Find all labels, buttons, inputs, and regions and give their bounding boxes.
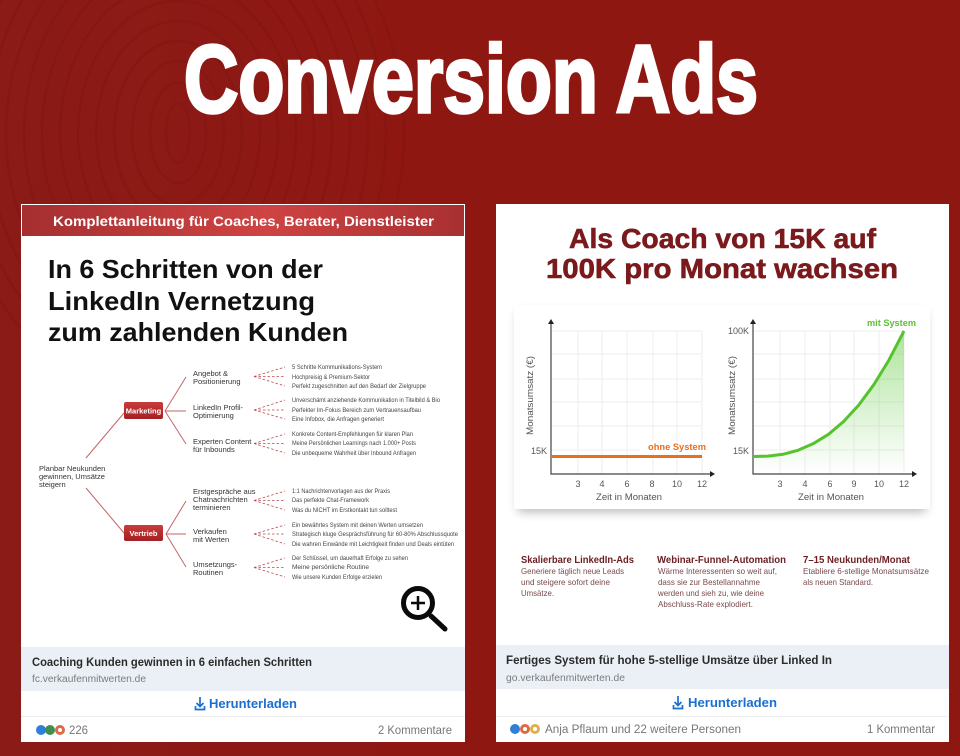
- topic labels: Erstgespräche aus: [193, 487, 256, 496]
- chart: ohne System: 10: [672, 479, 682, 489]
- detail bullet texts: 5 Schritte Kommunikations-System: [292, 365, 382, 371]
- benefit: 7–15 Neukunden/Monat: als neuen Standard.: [803, 577, 873, 587]
- card headline: Als Coach von 15K auf: [569, 223, 877, 254]
- chart: ohne System: Zeit in Monaten: [596, 492, 662, 502]
- link bar: fc.verkaufenmitwerten.de: [32, 674, 146, 685]
- fingerprint pattern: [0, 0, 420, 756]
- chart: ohne System: Monatsumsatz (€): [525, 356, 535, 435]
- detail bullet texts: Perfekter Im-Fokus Bereich zum Vertrauensaufbau: [292, 408, 421, 414]
- mind map: [39, 365, 459, 581]
- card headline: In 6 Schritten von der: [48, 254, 323, 284]
- card headline: LinkedIn Vernetzung: [48, 286, 315, 316]
- topic labels: für Inbounds: [193, 445, 235, 454]
- benefit: 7–15 Neukunden/Monat: [803, 555, 929, 587]
- chart: ohne System: 4: [599, 479, 605, 489]
- node: Marketing: [124, 402, 163, 419]
- topic labels: terminieren: [193, 503, 231, 512]
- link bar: Coaching Kunden gewinnen in 6 einfachen Schritten: [32, 657, 312, 669]
- reactions row: [510, 724, 935, 736]
- topic labels: Experten Content: [193, 437, 252, 446]
- mind map root: [39, 464, 105, 489]
- reactions row: 2 Kommentare: [378, 725, 452, 737]
- card header banner: Komplettanleitung für Coaches, Berater, Dienstleister: [53, 213, 435, 229]
- download button: Herunterladen: [688, 695, 777, 710]
- mind map branches: [86, 377, 186, 567]
- link bar: Fertiges System für hohe 5-stellige Umsätze über Linked In: [506, 655, 832, 667]
- benefit: Webinar-Funnel-Automation: werden und sieh zu, wie deine: [657, 588, 764, 598]
- card headline: zum zahlenden Kunden: [48, 317, 348, 347]
- benefit: Webinar-Funnel-Automation: [657, 555, 786, 609]
- chart: ohne System: 12: [697, 479, 707, 489]
- chart: mit System: 4: [802, 479, 808, 489]
- benefit: 7–15 Neukunden/Monat: Etabliere 6-stellige Monatsumsätze: [803, 566, 929, 576]
- benefit: Skalierbare LinkedIn-Ads: [521, 555, 634, 598]
- detail bullet texts: Strategisch kluge Gesprächsführung für 60-80% Abschlussquote: [292, 532, 459, 538]
- detail bullet texts: Eine Infobox, die Anfragen generiert: [292, 417, 384, 423]
- detail bullet texts: Perfekt zugeschnitten auf den Bedarf der Zielgruppe: [292, 384, 427, 390]
- mind map root: Planbar Neukunden: [39, 464, 105, 473]
- chart: mit System: 100K: [728, 326, 749, 336]
- card headline: [546, 223, 898, 284]
- topic labels: Chatnachrichten: [193, 495, 248, 504]
- benefit: 7–15 Neukunden/Monat: 7–15 Neukunden/Monat: [803, 555, 911, 566]
- panel: right ad card: [496, 204, 949, 742]
- detail bullet texts: Wie unsere Kunden Erfolge erzielen: [292, 575, 382, 581]
- topic labels: Angebot &: [193, 369, 228, 378]
- card header banner: [22, 205, 464, 236]
- node: Marketing: Marketing: [126, 406, 162, 416]
- detail bullet texts: Unverschämt anziehende Kommunikation in Titelbild & Bio: [292, 398, 441, 404]
- detail bullet texts: Konkrete Content-Empfehlungen für klaren Plan: [292, 432, 413, 438]
- topic labels: Verkaufen: [193, 527, 227, 536]
- chart: ohne System: ohne System: [648, 442, 706, 453]
- chart: ohne System: 3: [575, 479, 581, 489]
- chart panel: [514, 305, 930, 512]
- chart: mit System: 6: [827, 479, 833, 489]
- topic labels: Umsetzungs-: [193, 560, 238, 569]
- chart: mit System: 10: [874, 479, 884, 489]
- panel: left ad card: [21, 204, 465, 742]
- chart: ohne System: 8: [649, 479, 655, 489]
- benefit: Webinar-Funnel-Automation: Webinar-Funnel-Automation: [657, 555, 786, 566]
- detail bullet texts: Hochpreisig & Premium-Sektor: [292, 375, 370, 381]
- link bar: [496, 645, 949, 689]
- dashed connectors: [254, 367, 285, 577]
- title: Conversion Ads: [184, 26, 758, 133]
- chart: mit System: mit System: [867, 318, 916, 329]
- benefit: Webinar-Funnel-Automation: Wärme Interessenten so weit auf,: [658, 566, 777, 576]
- detail bullet texts: 1:1 Nachrichtenvorlagen aus der Praxis: [292, 489, 390, 495]
- detail bullet texts: Die wahren Einwände mit Leichtigkeit finden und Deals eintüten: [292, 542, 454, 548]
- node: Vertrieb: Vertrieb: [130, 529, 158, 538]
- link bar: go.verkaufenmitwerten.de: [506, 673, 625, 684]
- benefit: Webinar-Funnel-Automation: dass sie zur Bestellannahme: [658, 577, 760, 587]
- mind map root: gewinnen, Umsätze: [39, 472, 105, 481]
- topic labels: Positionierung: [193, 377, 241, 386]
- topic labels: mit Werten: [193, 535, 229, 544]
- detail bullet texts: Was du NICHT im Erstkontakt tun solltest: [292, 508, 397, 514]
- chart: ohne System: 15K: [531, 446, 547, 456]
- chart: ohne System: 6: [624, 479, 630, 489]
- chart: mit System: 12: [899, 479, 909, 489]
- reactions row: 1 Kommentar: [867, 724, 935, 736]
- chart: mit System: 9: [851, 479, 857, 489]
- benefit: Webinar-Funnel-Automation: Abschluss-Rate explodiert.: [658, 599, 753, 609]
- detail bullet texts: Ein bewährtes System mit deinen Werten umsetzen: [292, 523, 423, 529]
- detail bullet texts: Der Schlüssel, um dauerhaft Erfolge zu sehen: [292, 556, 408, 562]
- benefit: Skalierbare LinkedIn-Ads: Skalierbare LinkedIn-Ads: [521, 555, 634, 566]
- download button: Herunterladen: [209, 696, 297, 711]
- benefit: Skalierbare LinkedIn-Ads: Generiere täglich neue Leads: [521, 566, 624, 576]
- node: Vertrieb: [124, 525, 163, 541]
- detail bullet texts: Das perfekte Chat-Framework: [292, 498, 370, 504]
- chart: mit System: [727, 318, 917, 502]
- benefit: Skalierbare LinkedIn-Ads: Umsätze.: [521, 588, 554, 598]
- topic labels: Routinen: [193, 568, 223, 577]
- link bar: [21, 647, 465, 691]
- chart: ohne System: [525, 319, 715, 502]
- benefit: Skalierbare LinkedIn-Ads: und steigere sofort deine: [521, 577, 610, 587]
- topic labels: LinkedIn Profil-: [193, 403, 244, 412]
- chart: mit System: Monatsumsatz (€): [727, 356, 737, 435]
- detail bullet texts: Meine persönliche Routine: [292, 565, 370, 571]
- topic labels: Optimierung: [193, 411, 234, 420]
- card headline: [48, 254, 348, 347]
- detail bullet texts: Meine Persönlichen Learnings nach 1.000+ Posts: [292, 441, 416, 447]
- chart: mit System: Zeit in Monaten: [798, 492, 864, 502]
- chart: mit System: 3: [777, 479, 783, 489]
- card headline: 100K pro Monat wachsen: [546, 253, 898, 284]
- reactions row: [36, 725, 452, 737]
- detail bullet texts: Die unbequeme Wahrheit über Inbound Anfragen: [292, 451, 416, 457]
- reactions row: 226: [69, 725, 88, 737]
- detail bullet texts: [292, 365, 459, 581]
- topic labels: [193, 369, 256, 577]
- reactions row: Anja Pflaum und 22 weitere Personen: [545, 724, 741, 736]
- icon: magnifier: [404, 588, 445, 629]
- chart: mit System: 15K: [733, 446, 749, 456]
- mind map root: steigern: [39, 480, 66, 489]
